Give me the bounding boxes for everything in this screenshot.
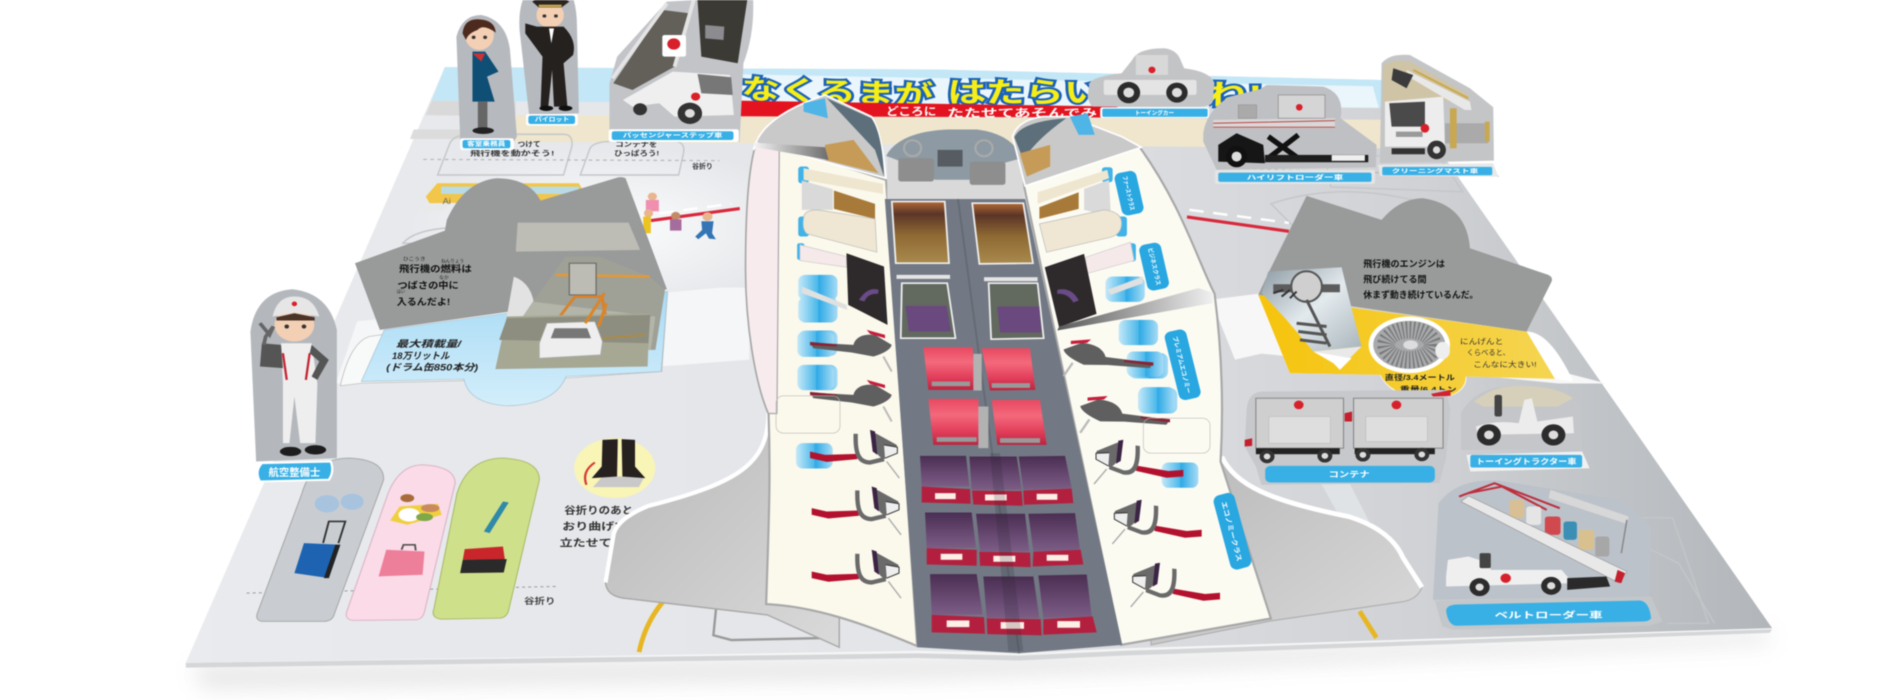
- cockpit seats: [898, 140, 1005, 185]
- label: ハイリフトローダー車: [1247, 173, 1344, 182]
- title text left: なくるまが: [741, 73, 934, 111]
- label: トーイングカー: [1135, 109, 1174, 117]
- label: [1265, 466, 1435, 483]
- refuel photo: [500, 257, 665, 350]
- right nose window: [1070, 113, 1095, 135]
- red subtitle bar: [739, 101, 1117, 117]
- bus: [422, 183, 587, 212]
- light reflection on board: [408, 144, 815, 312]
- center fold: [958, 199, 1019, 653]
- conveyor belt: [1461, 496, 1627, 583]
- people: [643, 193, 716, 239]
- stairs: [613, 10, 690, 90]
- fold instruction text: 立たせてね: [560, 537, 625, 549]
- right windshield: [1014, 118, 1066, 160]
- first class label: [1113, 170, 1145, 216]
- title text center: はたらい: [947, 77, 1103, 108]
- right cockpit window piece: [1013, 117, 1141, 186]
- beige backdrop: [1474, 386, 1573, 407]
- platform: [1213, 95, 1335, 128]
- standee: belt loader: [1433, 480, 1662, 630]
- standee: container: [1245, 390, 1451, 485]
- flap text: 入るんだよ!: [397, 297, 450, 308]
- card: [1433, 480, 1651, 600]
- stand captions: つけて: [518, 141, 541, 148]
- blue window peeks left: [797, 167, 809, 260]
- seat outline left: [776, 396, 840, 433]
- figure: [525, 0, 574, 111]
- standee: aircraft mechanic: [250, 289, 337, 481]
- white panel edge: [1258, 295, 1573, 400]
- gray fold-up flap: [355, 177, 667, 330]
- economy class label: エコノミークラス: [1220, 500, 1244, 563]
- subtitle: たたせてあそんでみ: [947, 107, 1097, 119]
- red runway line right: [1187, 217, 1289, 231]
- left economy seats: [810, 430, 901, 598]
- label: トーイングトラクター車: [1476, 456, 1577, 466]
- top fold left: [754, 143, 829, 160]
- standee: high lift loader: [1203, 85, 1377, 184]
- left business suite: [800, 245, 888, 325]
- subtitle left: どころに: [886, 105, 936, 118]
- business class seats: [896, 275, 1044, 339]
- container left: [1245, 398, 1343, 448]
- comparison text: くらべると、: [1467, 348, 1510, 357]
- chassis and scissor lift: [1218, 133, 1368, 167]
- left premium seats: [810, 330, 892, 421]
- stand captions: 飛行機を動かそう!: [470, 149, 554, 157]
- right hull cream panel: [1023, 146, 1271, 645]
- logo panel: [662, 35, 686, 57]
- boots icon: [574, 438, 655, 498]
- white taxiway bands: [336, 288, 749, 384]
- fan size text: [1385, 373, 1457, 394]
- gray fold-up flap: [1258, 196, 1552, 332]
- stand captions: 谷折り: [692, 162, 713, 170]
- left windshield: [827, 98, 884, 177]
- left wing: [605, 414, 839, 647]
- loader vehicle: [1446, 553, 1625, 596]
- dollies: [1256, 448, 1435, 463]
- flap text: つばさの中に: [397, 279, 459, 291]
- figure: [260, 297, 329, 456]
- sky band: [432, 67, 1410, 108]
- fuel capacity text: 18万リットル: [392, 352, 450, 362]
- flap furigana: [397, 256, 464, 295]
- right windows upper: [1105, 277, 1177, 413]
- refuel truck: [546, 322, 604, 350]
- stand captions: [470, 140, 713, 170]
- left hull cream panel: [746, 139, 917, 646]
- engine fan: [1369, 317, 1450, 373]
- yellow guide lines: [639, 602, 663, 652]
- card: [1245, 390, 1451, 485]
- economy seat row 2: [925, 512, 1083, 567]
- aisle floor: [885, 199, 1122, 653]
- fold instruction text: [560, 505, 633, 549]
- boom arm: [1392, 68, 1472, 110]
- right wing: [1151, 455, 1422, 645]
- standee: pilot: [519, 0, 579, 126]
- label: [1215, 170, 1375, 184]
- comparison text: にんげんと: [1460, 337, 1503, 346]
- first class label: ファーストクラス: [1121, 175, 1137, 211]
- flap text: 飛び続けてる間: [1363, 274, 1427, 285]
- stand markings: [403, 134, 1715, 623]
- fold instruction text: おり曲げて: [562, 521, 627, 533]
- flap furigana: なか: [439, 275, 449, 281]
- white wing: [340, 293, 668, 386]
- fuel photo and flap: [355, 177, 667, 350]
- stand captions: ひっぱろう!: [614, 149, 659, 157]
- card: [456, 15, 517, 148]
- instrument dome: [886, 129, 1022, 180]
- fold caption: 谷折り: [524, 595, 555, 606]
- engine: [506, 277, 535, 327]
- truck: [1385, 97, 1490, 159]
- premium economy label: [1163, 328, 1202, 401]
- right first class suite: [1038, 170, 1122, 252]
- standee: towing car: [1088, 48, 1214, 118]
- label: ベルトローダー車: [1495, 610, 1603, 620]
- tractor: [1476, 395, 1574, 446]
- card: [1088, 48, 1214, 107]
- standee: passenger step car: [609, 0, 753, 142]
- beige apron band: [498, 115, 1439, 149]
- flap furigana: ひこうき: [403, 256, 426, 262]
- red runway line left: [651, 209, 740, 221]
- label: パイロット: [535, 116, 569, 123]
- card: [1461, 386, 1582, 450]
- right wing white edge: [1222, 457, 1422, 587]
- conveyor rails: [1459, 483, 1560, 510]
- card: [1380, 55, 1494, 163]
- standee: towing tractor: [1461, 386, 1590, 472]
- center shadow: [990, 453, 1023, 651]
- luggage: [1509, 500, 1609, 556]
- flap text: 飛行機の燃料は: [399, 263, 472, 275]
- engine cutaway: [1262, 267, 1362, 370]
- wing underside: [516, 223, 640, 252]
- comparison text: [1460, 337, 1537, 369]
- panel: engine information: [1258, 196, 1573, 400]
- left cockpit window piece: [754, 95, 886, 178]
- right arm light: [1107, 277, 1143, 295]
- small board details: bus and people: [422, 140, 716, 239]
- economy class label: [1212, 491, 1253, 571]
- right windows lower: [1127, 352, 1198, 488]
- right premium seats: [1064, 335, 1170, 449]
- fold instruction text: 谷折りのあと: [564, 505, 633, 517]
- pink slot: attendant items: [346, 465, 455, 620]
- standee: flight attendant: [456, 15, 517, 150]
- left wing white edge: [605, 414, 769, 583]
- premium economy label: プレミアムエコノミー: [1171, 336, 1192, 394]
- left windows lower: [796, 332, 834, 468]
- fan size text: 直径/3.4メートル: [1385, 373, 1456, 382]
- left nose window: [804, 98, 828, 118]
- fuel capacity text: (ドラム缶850本分): [386, 362, 479, 373]
- label: [1435, 596, 1662, 630]
- label: 客室乗務員: [467, 139, 506, 148]
- right economy seats: [1094, 436, 1220, 619]
- economy seat row 1: [920, 456, 1073, 506]
- vehicle: [1104, 55, 1197, 103]
- flap furigana: ねんりょう: [441, 259, 464, 264]
- front stand outline: [713, 599, 839, 640]
- cockpit floor: [887, 156, 1024, 201]
- fold items: [247, 438, 655, 621]
- left arm light: [802, 287, 847, 310]
- label: パッセンジャーステップ車: [623, 131, 723, 139]
- card: [519, 0, 579, 115]
- canopy: [1549, 490, 1629, 553]
- title backing: [739, 74, 1379, 108]
- right business suite: [1045, 242, 1134, 327]
- card: [250, 289, 337, 461]
- flap text: [397, 263, 472, 308]
- economy seat row 3: [930, 574, 1097, 635]
- fold-out airport board: [186, 67, 1772, 668]
- label: 航空整備士: [269, 467, 320, 479]
- label: コンテナ: [1329, 470, 1370, 479]
- beige backdrop: [1383, 61, 1470, 105]
- title banner: [739, 73, 1263, 119]
- label: [609, 129, 739, 142]
- container right: [1345, 390, 1451, 448]
- yellow panel: [1258, 295, 1555, 399]
- gray slot: pilot items: [257, 458, 384, 621]
- figure: [463, 19, 499, 134]
- truck cab: [623, 72, 734, 124]
- fan size text: 重量/6.4トン: [1400, 385, 1457, 394]
- comparison text: こんなに大きい!: [1473, 360, 1537, 369]
- card: [1203, 85, 1377, 170]
- board shadow: [192, 632, 1774, 688]
- left first class suite: [802, 168, 883, 252]
- seat outline right: [1143, 418, 1210, 453]
- blue panel: [361, 292, 668, 406]
- first class seats: [892, 202, 1033, 264]
- flap text: [1363, 258, 1478, 300]
- top fold right: [1057, 288, 1213, 331]
- title text right: ね!: [1205, 79, 1263, 110]
- premium economy seats: [923, 347, 1047, 448]
- fuel capacity text: 最大積載量/: [396, 339, 462, 350]
- card: [609, 0, 753, 142]
- aircraft cabin cross-section: [746, 95, 1271, 653]
- business class label: [1138, 242, 1170, 292]
- flap furigana: はい: [397, 290, 405, 295]
- panel: fuel information: [340, 292, 668, 406]
- green slot: mechanic items: [433, 458, 539, 619]
- standee: cleaning truck: [1378, 55, 1498, 177]
- fuel capacity text: [386, 339, 479, 373]
- stand captions: コンテナを: [615, 140, 657, 148]
- business class label: ビジネスクラス: [1146, 247, 1163, 286]
- folding line: [247, 586, 557, 593]
- flap text: 休まず動き続けているんだ。: [1363, 289, 1478, 300]
- left windows upper: [798, 275, 838, 390]
- refuel truck lower part: [495, 293, 650, 369]
- blue window peeks right: [1102, 167, 1136, 262]
- flap text: 飛行機のエンジンは: [1363, 258, 1445, 269]
- label: [257, 461, 332, 481]
- bus: Ai: [443, 197, 451, 206]
- left hull pink band: [746, 139, 779, 414]
- label: クリーニングマスト車: [1392, 167, 1479, 175]
- cabin: [698, 0, 747, 63]
